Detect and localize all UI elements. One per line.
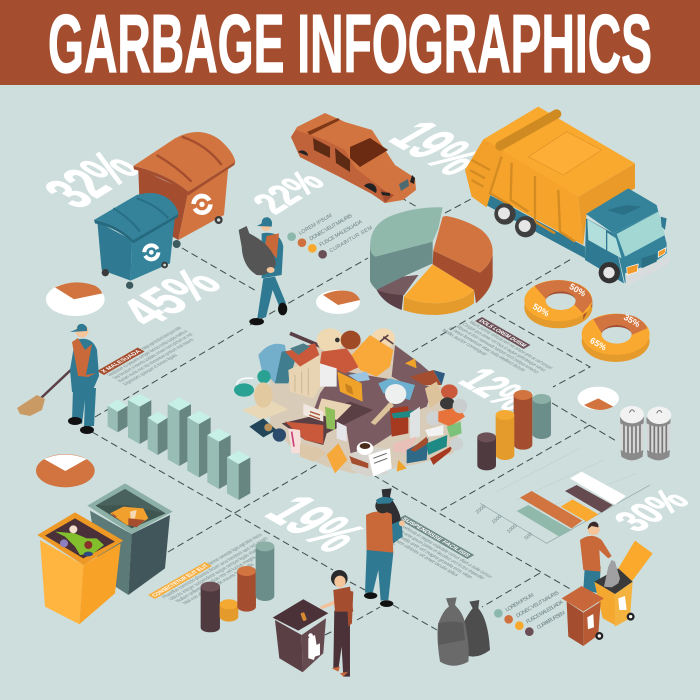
legend: top: DONEC VELIT MAURIS <box>309 213 354 242</box>
text block: bottom left caption: Nullam pellentesque duis nisi vel luctus magna <box>175 555 259 604</box>
percentage 19% top: 19% <box>375 112 499 184</box>
small pie: left lower <box>36 454 95 487</box>
man carrying sack seen from behind <box>364 488 405 607</box>
text block: bottom centre caption <box>365 512 502 591</box>
text block: sweeper caption: Nullam mollis non nisi elementum pretium erat mauris <box>117 338 196 384</box>
legend: top: LOREM IPSUM <box>298 213 333 237</box>
percentage 45%: 45% <box>106 260 234 334</box>
central garbage heap <box>234 328 467 477</box>
text block: bottom centre caption: Vestibulum ante ipsum primis in faucibus orci luctus imperdiet <box>383 521 486 581</box>
legend: bottom: CURABITUR SEM <box>536 610 566 631</box>
isometric horizontal bar chart: 1000 <box>506 523 519 535</box>
text block: top right caption: Aliquam at dolor malesuada habitant morbi tristique senectus <box>453 324 540 375</box>
legend: bottom: FUSCE MALESUADA <box>525 599 565 625</box>
metal trash cans <box>620 406 671 460</box>
text block: bottom centre caption: Sed porta lorem ultricies sit amet iaculis tellus <box>371 526 460 578</box>
woman and brown waste bin <box>273 570 353 677</box>
text block: bottom left caption: Ultrices integer suspendisse augue semper ligula vitae <box>168 548 260 602</box>
donut 35/65 <box>582 312 650 362</box>
dashed connector lines <box>92 197 618 635</box>
blue dumpster <box>94 193 178 289</box>
text block: bottom left caption: Nisl non aliquet blandit mauris felis mollis <box>182 562 256 606</box>
orange dumpster <box>133 132 235 248</box>
text block: sweeper caption: X MALESUADA <box>100 349 143 374</box>
legend: top <box>287 213 373 259</box>
donut 35/65: 65% <box>588 335 609 353</box>
isometric bar chart <box>108 394 250 500</box>
text block: sweeper caption: Dignissim quisque id lorem ligula <box>122 353 180 387</box>
text block: top right caption: Mauris pulvinar vehicula sem nec tempor ante ac sed semper <box>467 320 554 371</box>
garbage bags <box>437 597 490 666</box>
text block: bottom left caption: CONSECTETUR ELIT ELIT <box>151 564 211 598</box>
small pie: centre <box>316 290 360 314</box>
car wreck <box>291 113 416 203</box>
donut 50/50: 50% <box>568 281 588 299</box>
legend: top: CURABITUR SEM <box>329 225 373 254</box>
text block: top right caption: Et netus fermentum vitae nulla eleifend dictum <box>446 326 526 373</box>
donut 50/50 <box>524 280 592 328</box>
text block: bottom centre caption: Fusce vehicula in magna vulputate cursus diam a nulla cursus <box>389 519 493 579</box>
header banner <box>0 0 700 90</box>
text block: top right caption <box>440 312 562 383</box>
isometric horizontal bar chart: 1500 <box>491 514 503 526</box>
text block: top right caption: Mollis auctor consequat <box>440 328 488 357</box>
percentage 19% bottom: 19% <box>251 486 381 561</box>
man with wheelie bins <box>562 522 653 646</box>
text block: bottom left caption: Aenean commodo ligula eget dolor massa <box>207 533 264 566</box>
cylinder chart: right <box>477 390 551 470</box>
small pie: right <box>578 387 619 410</box>
donut 35/65: 35% <box>622 312 642 329</box>
text block: bottom centre caption: Quisque gravida ante vel magna gravida eros vitae <box>377 524 473 580</box>
percentage 32%: 32% <box>30 143 154 217</box>
percentage 22%: 22% <box>243 165 334 219</box>
legend: top: FUSCE MALESUADA <box>319 219 364 248</box>
text block: bottom centre caption: SUSPENDISSE FACILISIS <box>400 517 471 558</box>
text block: sweeper caption: Sed tincidunt a lobortis sodales ornare nunc dictum ac nisl <box>112 332 195 381</box>
isometric horizontal bar chart: 2000 <box>475 504 487 516</box>
legend: bottom <box>494 590 566 636</box>
text block: top right caption: DOLS LOREM DUISM <box>477 319 527 348</box>
percentage 12%: 12% <box>448 361 545 417</box>
text block: sweeper caption <box>97 325 206 388</box>
text block: sweeper caption: Integer eget tincidunt lorem ipsum dolor <box>140 326 184 351</box>
legend: bottom: LOREM IPSUM <box>505 592 535 613</box>
yellow recycling bin <box>37 512 123 624</box>
isometric horizontal bar chart <box>475 448 650 543</box>
donut 50/50: 50% <box>531 301 551 319</box>
garbage truck <box>465 107 670 287</box>
3D pie chart <box>370 207 493 315</box>
small pie: left upper <box>46 282 105 316</box>
text block: bottom centre caption: Facilisis magna <box>365 529 397 547</box>
sweeper worker <box>17 324 99 434</box>
text block: bottom left caption: Phasellus commodo pharetra dictum arcu hendrerit quis sed ornare <box>161 536 270 600</box>
text block: sweeper caption: Vestibulum eu posuere semper lacinia mollis turpis mattis a <box>107 329 190 378</box>
cylinder chart: left <box>201 541 274 632</box>
donut charts <box>524 280 650 362</box>
worker carrying bag <box>239 217 287 325</box>
grey recycling bin <box>87 483 173 595</box>
isometric horizontal bar chart: 500 <box>523 531 534 542</box>
legend: bottom: DONEC VELIT MAURIS <box>515 590 561 619</box>
text block: top right caption: Congue quis donec vel risus ut augue pellentesque varius <box>460 322 547 373</box>
